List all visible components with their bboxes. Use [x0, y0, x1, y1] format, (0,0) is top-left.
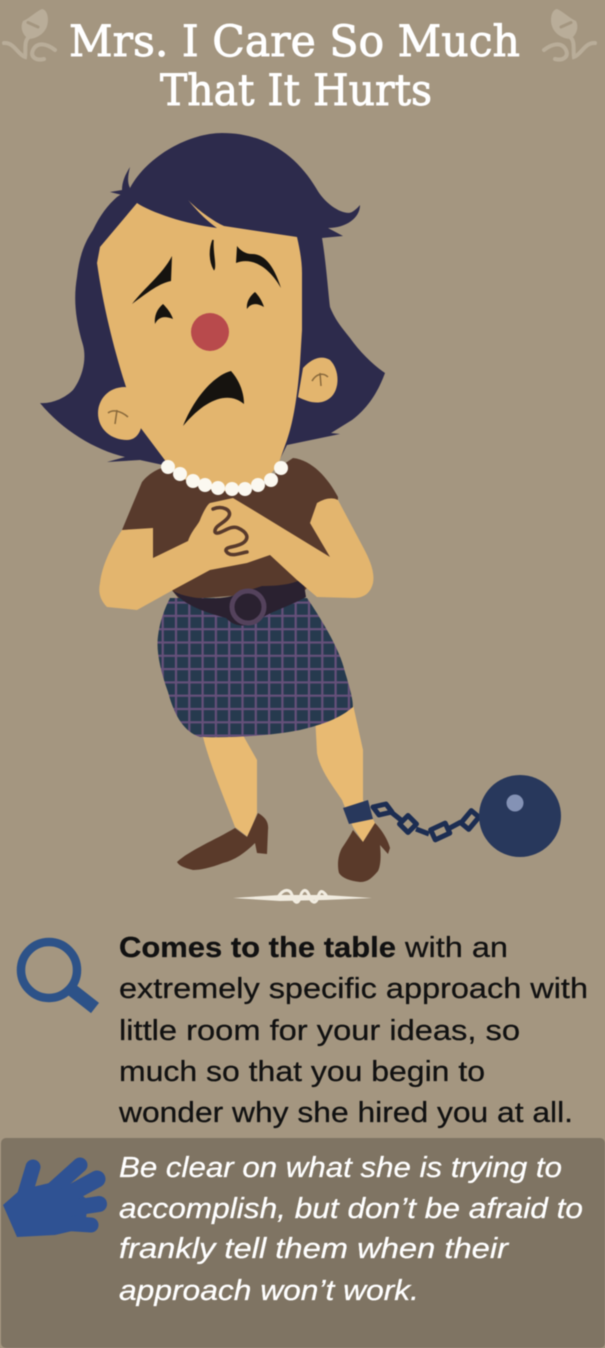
blouse: [122, 458, 338, 600]
left eyebrow: [132, 256, 172, 304]
title: That It Hurts: [160, 66, 432, 116]
title: Mrs. I Care So Much: [69, 17, 520, 67]
chain: [373, 804, 479, 840]
hand icon: [3, 1165, 99, 1237]
shackle: [343, 800, 373, 824]
description text: Comes to the table: [119, 932, 396, 964]
advice text: accomplish, but don’t be afraid to: [119, 1193, 583, 1225]
skirt: [157, 598, 353, 737]
finger lines: [213, 508, 247, 555]
left ornament: [4, 9, 55, 60]
right eyebrow: [236, 246, 281, 288]
right ornament: [544, 9, 595, 60]
right leg: [315, 700, 375, 842]
advice text: frankly tell them when their: [119, 1233, 510, 1265]
stray hairs: [110, 167, 130, 195]
description text: wonder why she hired you at all.: [118, 1097, 573, 1129]
forehead line: [210, 240, 215, 269]
belt: [173, 578, 306, 626]
nose: [191, 313, 229, 351]
advice text: approach won’t work.: [119, 1275, 419, 1307]
face: [97, 200, 302, 497]
description text: extremely specific approach with: [119, 973, 588, 1005]
pearl necklace: [161, 460, 288, 496]
left shoe: [177, 813, 268, 870]
iron ball: [479, 775, 561, 857]
ground squiggle: [233, 890, 372, 902]
right ear: [298, 358, 338, 403]
left leg: [203, 730, 257, 837]
description text: little room for your ideas, so: [119, 1015, 520, 1047]
left ear: [98, 387, 142, 440]
mouth: [183, 371, 244, 426]
character illustration: [40, 133, 561, 902]
hair: [40, 133, 385, 465]
advice panel: [1, 1138, 605, 1348]
arms and hands: [99, 498, 373, 610]
right eye: [247, 292, 264, 309]
left eye: [155, 304, 173, 324]
belt buckle: [232, 591, 264, 623]
advice text: Be clear on what she is trying to: [119, 1152, 562, 1184]
magnifying glass icon: [21, 942, 95, 1008]
advice text: [119, 1152, 583, 1307]
right shoe: [338, 823, 390, 882]
title: [69, 17, 520, 116]
description text: [118, 932, 588, 1129]
description text: with an: [404, 932, 508, 964]
description text: much so that you begin to: [119, 1056, 485, 1088]
